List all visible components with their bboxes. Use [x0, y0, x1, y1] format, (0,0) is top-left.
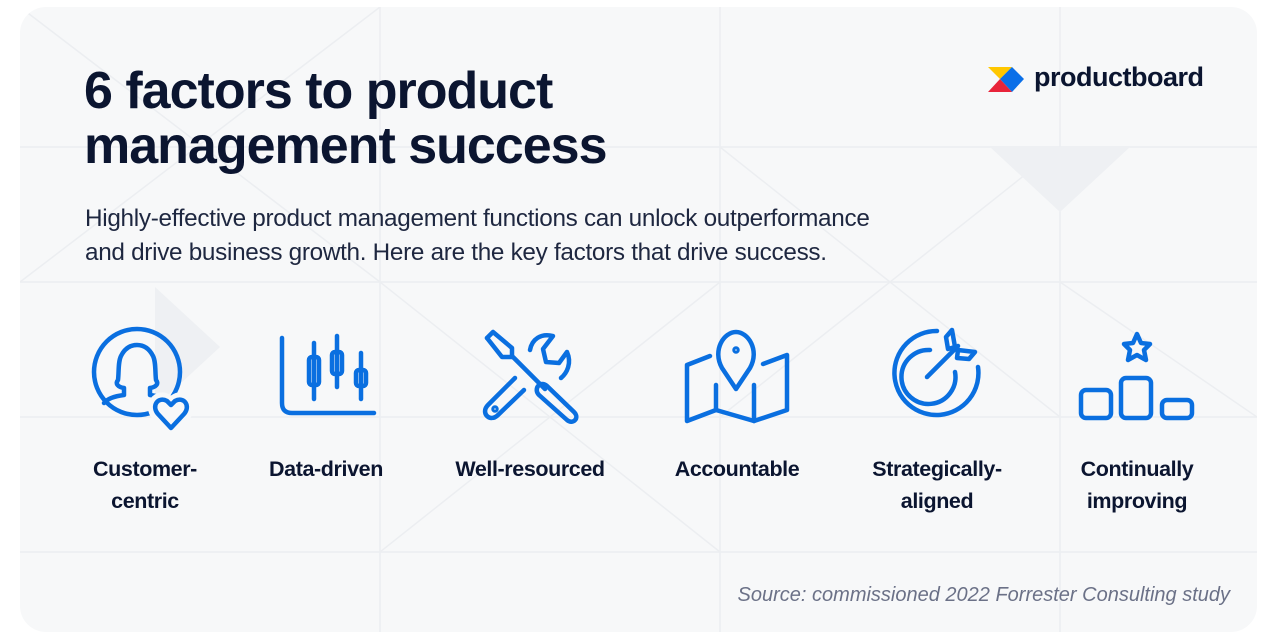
subtitle: and drive business growth. Here are the key factors that drive success.	[85, 239, 827, 266]
title: 6 factors to product	[84, 62, 552, 120]
label: strategically-aligned: Strategically-	[872, 457, 1002, 481]
label: customer-centric: centric	[111, 489, 179, 513]
label: accountable: Accountable	[675, 457, 799, 481]
source: Source: commissioned 2022 Forrester Consulting study	[738, 584, 1230, 606]
subtitle	[85, 205, 870, 266]
icon: tools	[485, 332, 576, 422]
label: well-resourced: Well-resourced	[455, 457, 605, 481]
icon: map	[687, 332, 787, 421]
icon: data	[282, 336, 374, 413]
label: customer-centric	[93, 457, 197, 513]
subtitle: Highly-effective product management functions can unlock outperformance	[85, 205, 870, 232]
label: strategically-aligned: aligned	[901, 489, 973, 513]
title	[84, 62, 606, 175]
logo: productboard: productboard	[1034, 62, 1204, 92]
icon: customer	[94, 329, 188, 430]
label: continually improving: Continually	[1081, 457, 1193, 481]
icon: improving	[1081, 334, 1192, 418]
icon: target	[894, 330, 978, 415]
title: management success	[84, 117, 606, 175]
label: continually improving: improving	[1087, 489, 1187, 513]
label: continually improving	[1081, 457, 1194, 513]
label: customer-centric: Customer-	[93, 457, 197, 481]
label: data-driven: Data-driven	[269, 457, 383, 481]
label: strategically-aligned	[872, 457, 1002, 513]
